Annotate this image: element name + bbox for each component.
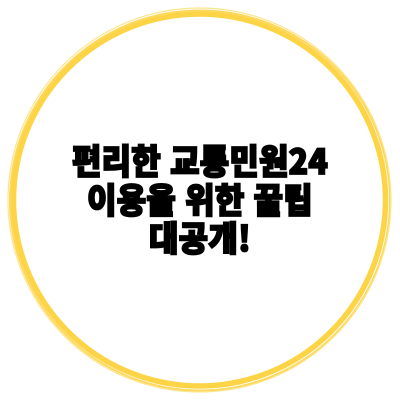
title — [72, 135, 328, 262]
title: 대공개! — [149, 212, 251, 262]
title: 이용을 위한 꿀팁 — [87, 174, 313, 223]
title: 편리한 교통민원24 — [72, 135, 328, 185]
